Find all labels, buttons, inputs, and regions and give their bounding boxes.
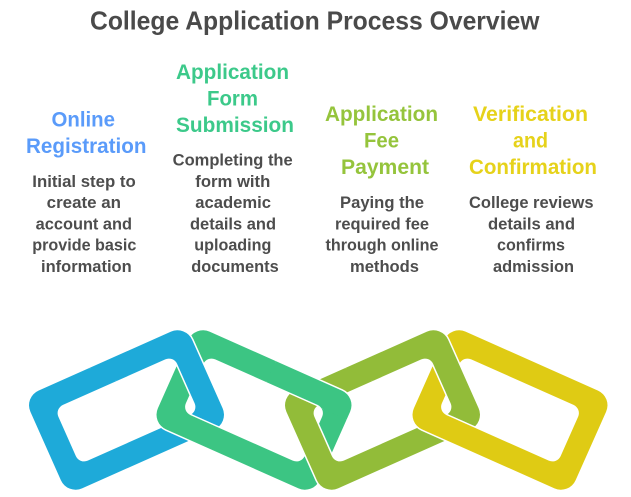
column: application fee payment [325,102,438,276]
text: application form description [173,152,293,276]
heading: verification and confirmation: Confirmation [469,155,597,179]
heading: application fee payment: Payment [341,155,429,179]
text: application form description: documents [191,258,279,276]
text: verification description [469,194,594,276]
heading: application form submission: Form [207,86,258,110]
column: verification and confirmation [469,102,597,276]
heading: application fee payment: Fee [364,128,399,152]
column: application form submission [173,60,294,276]
text: application form description: form with [195,173,270,191]
text: verification description: admission [493,258,574,276]
heading: online registration: Registration [26,134,146,158]
link: blue [24,325,229,495]
heading: verification and confirmation: Verification [473,102,588,126]
text: verification description: College reviews [469,194,594,212]
chain of four interlocking links [24,325,613,495]
text: online registration description: information [41,258,132,276]
text: application form description: uploading [194,237,271,255]
text: application fee description: Paying the [340,194,424,212]
text: online registration description: Initial step to [32,173,136,191]
text: online registration description: create an [47,194,121,212]
link: yellow [407,325,613,495]
link: green [151,325,357,495]
title: College Application Process Overview [90,6,540,36]
heading: application fee payment: Application [325,102,438,126]
text: online registration description: account and [36,216,132,234]
heading: online registration: Online [52,108,115,132]
text: online registration description [32,173,136,276]
heading: verification and confirmation: and [513,128,548,152]
column: online registration [26,108,146,276]
text: application form description: Completing the [173,152,293,170]
text: application fee description [326,194,438,276]
text: application form description: academic [195,194,271,212]
text: application fee description: required fee [335,216,429,234]
heading: verification and confirmation [469,102,597,179]
heading: application form submission: Submission [176,113,294,137]
heading: online registration [26,108,146,158]
text: online registration description: provide basic [32,237,136,255]
text: verification description: confirms [497,237,565,255]
link: olive [280,325,485,495]
text: verification description: details and [488,216,575,234]
text: application fee description: through online [326,237,438,255]
heading: application form submission: Application [176,60,289,84]
text: application fee description: methods [350,258,419,276]
text: application form description: details and [190,216,276,234]
heading: application form submission [176,60,294,137]
heading: application fee payment [325,102,438,179]
